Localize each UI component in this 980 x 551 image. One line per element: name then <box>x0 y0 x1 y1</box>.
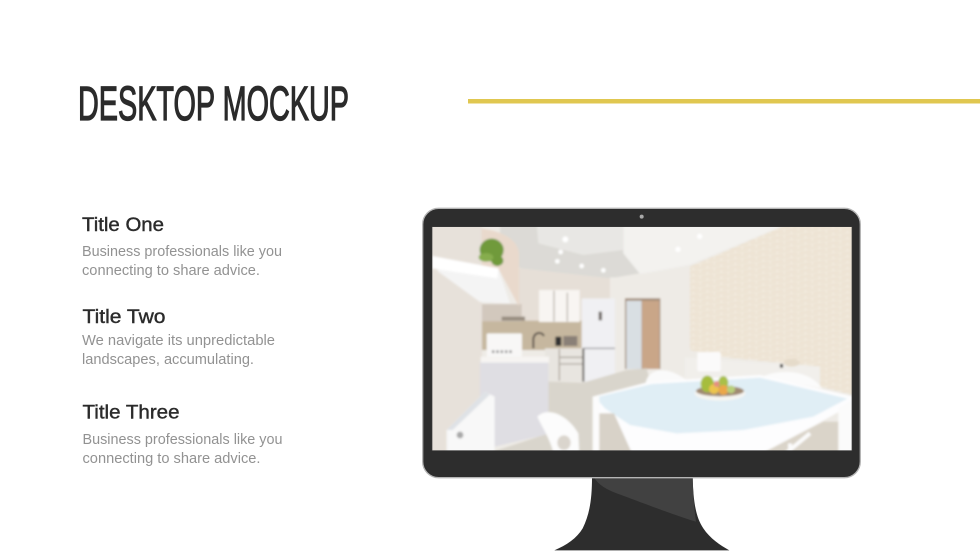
kitchen wall <box>519 268 610 323</box>
text block: title one: Title One <box>82 214 164 236</box>
sofa <box>685 357 820 388</box>
back wall <box>610 277 690 374</box>
screen photo: white kitchen and dining room <box>430 225 854 453</box>
left wall <box>430 225 482 453</box>
text block: title one <box>82 214 282 279</box>
screen edge <box>432 227 852 451</box>
fruit bowl <box>694 392 746 401</box>
shelf <box>438 269 509 303</box>
ceiling <box>500 227 638 278</box>
counter items <box>555 337 561 346</box>
chairs <box>645 370 684 383</box>
island <box>480 361 548 447</box>
text block: title two: landscapes, accumulating. <box>82 351 254 368</box>
table <box>593 375 854 453</box>
brick wall <box>690 225 854 395</box>
monitor body <box>423 208 860 478</box>
text block: title three: Business professionals like you <box>82 431 282 448</box>
text block: title two: We navigate its unpredictable <box>82 332 275 349</box>
text block: title two: Title Two <box>82 306 166 328</box>
floor <box>490 368 650 453</box>
title: DESKTOP MOCKUP <box>78 78 349 131</box>
yellow header rule <box>468 99 980 104</box>
doorway <box>625 298 660 369</box>
ceiling lights <box>555 234 702 273</box>
microwave <box>487 333 522 357</box>
text block: title three: connecting to share advice. <box>82 450 260 467</box>
curved column <box>482 228 519 307</box>
fridge <box>582 298 615 382</box>
base cabinets <box>545 348 583 382</box>
under-table area <box>768 421 839 450</box>
plant <box>479 239 504 266</box>
text block: title three <box>82 402 282 467</box>
cabinets <box>539 290 580 322</box>
radiator <box>447 392 495 453</box>
text block: title one: Business professionals like you <box>82 243 282 260</box>
text block: title three: Title Three <box>82 402 180 424</box>
webcam <box>640 215 644 219</box>
desktop monitor <box>423 208 860 550</box>
text block: title one: connecting to share advice. <box>82 262 260 279</box>
monitor stand <box>554 477 729 550</box>
text block: title two <box>82 306 275 368</box>
backsplash <box>482 321 582 350</box>
